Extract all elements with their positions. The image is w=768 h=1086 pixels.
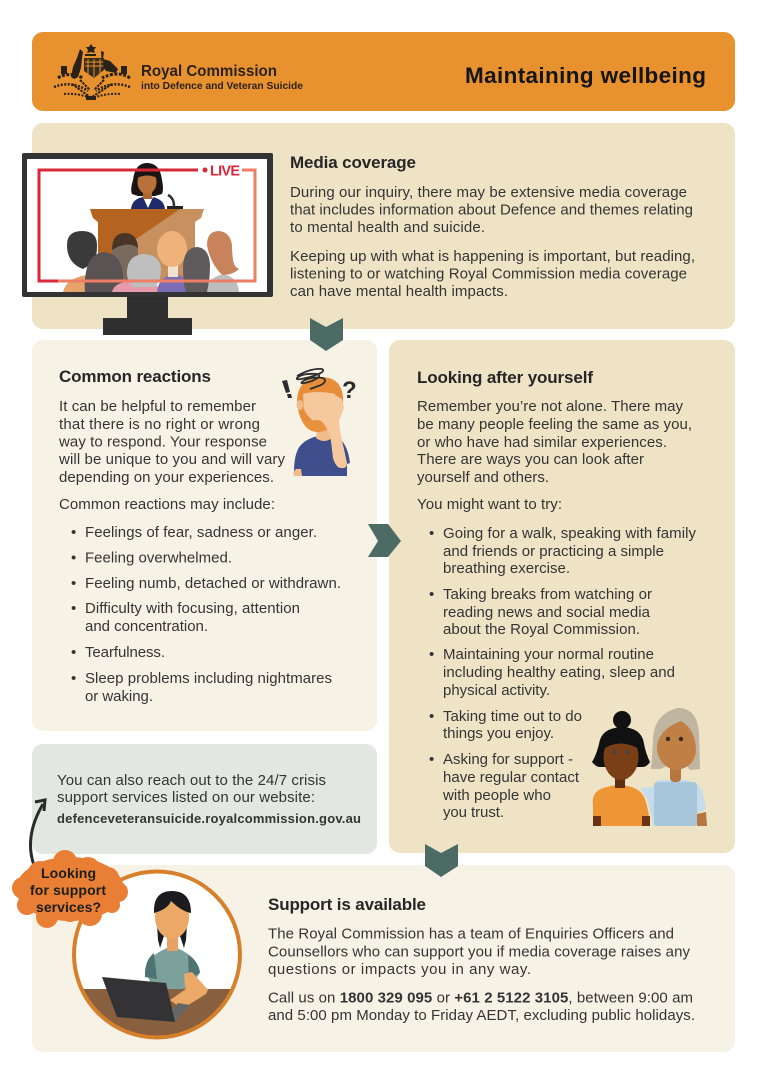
heading: media coverage: Media coverage <box>290 153 416 172</box>
list: things to try: and friends or practicing a simple <box>443 543 664 560</box>
heading: support is available: Support is available <box>268 895 426 914</box>
list: things to try: about the Royal Commission. <box>443 621 640 638</box>
text: media impacts <box>290 248 695 300</box>
text: media intro: During our inquiry, there may be extensive media coverage <box>290 184 687 201</box>
text: not alone <box>417 398 692 486</box>
text: media impacts: can have mental health impacts. <box>290 283 508 300</box>
heading: looking after yourself: Looking after yourself <box>417 368 593 387</box>
list: things to try <box>429 525 696 821</box>
list: things to try: including healthy eating, sleep and <box>443 664 675 681</box>
list: reactions: • <box>71 524 76 541</box>
illustration: person at laptop in circle <box>72 870 242 1040</box>
LIVE label: LIVE <box>210 164 240 180</box>
list: things to try: physical activity. <box>443 682 550 699</box>
question mark: ? <box>342 377 357 404</box>
text: media intro <box>290 184 693 236</box>
text: not alone: There are ways you can look after <box>417 451 644 468</box>
arm <box>170 972 208 1005</box>
title: Maintaining wellbeing <box>465 63 706 88</box>
audience <box>63 231 239 292</box>
arrow: media to reactions <box>310 318 343 351</box>
panel: media coverage <box>32 123 735 329</box>
panel: crisis support services <box>32 744 377 854</box>
arrow: looking after to support <box>425 844 458 877</box>
list: reactions <box>71 524 341 705</box>
text: not alone: be many people feeling the same as you, <box>417 416 692 433</box>
text: media impacts: Keeping up with what is happening is important, but reading, <box>290 248 695 265</box>
callout text: services? <box>36 899 101 915</box>
list: things to try: with people who <box>442 787 551 804</box>
list: reactions: Sleep problems including nightmares <box>85 670 332 687</box>
text: support team: questions or impacts you in any way. <box>268 961 531 978</box>
list: reactions: Difficulty with focusing, attention <box>85 600 300 617</box>
list: things to try: • <box>429 525 434 542</box>
list: reactions: • <box>71 575 76 592</box>
text: media intro: that includes information about Defence and themes relating <box>290 202 693 218</box>
list: things to try: things you enjoy. <box>443 725 554 742</box>
text: reactions intro: will be unique to you and will vary <box>58 451 286 468</box>
heading: common reactions: Common reactions <box>59 367 211 386</box>
text: support team <box>268 926 690 978</box>
logo text <box>141 63 303 92</box>
text: media impacts: listening to or watching Royal Commission media coverage <box>290 266 687 282</box>
list: things to try: • <box>429 646 434 663</box>
callout text: Looking <box>41 865 96 881</box>
list: reactions: Feelings of fear, sadness or anger. <box>85 524 317 541</box>
text: media intro: to mental health and suicide. <box>290 219 485 236</box>
callout text <box>30 865 106 915</box>
text: reactions may include: Common reactions may include: <box>59 496 275 513</box>
callout text: for support <box>30 882 106 898</box>
list: reactions: and concentration. <box>85 618 208 635</box>
laptop <box>102 977 190 1022</box>
panel: support is available <box>32 865 735 1052</box>
text: not alone: yourself and others. <box>417 469 549 486</box>
list: things to try: breathing exercise. <box>443 560 570 577</box>
text: not alone: Remember you’re not alone. There may <box>417 398 684 415</box>
desk <box>84 989 230 1036</box>
list: things to try: Taking breaks from watching or <box>443 586 652 603</box>
text: support team: The Royal Commission has a team of Enquiries Officers and <box>268 926 674 942</box>
LIVE frame <box>39 170 255 281</box>
icon: coat of arms <box>54 44 130 98</box>
text: reactions intro: that there is no right or wrong <box>59 416 260 433</box>
text: contact details <box>268 990 695 1024</box>
list: reactions: • <box>71 644 76 661</box>
list: reactions: • <box>71 550 76 566</box>
text: reactions intro: It can be helpful to remember <box>59 398 256 415</box>
text: support team: Counsellors who can support you if media coverage raises any <box>268 944 690 960</box>
lectern <box>90 209 204 282</box>
list: things to try: Maintaining your normal routine <box>443 646 654 663</box>
list: things to try: Going for a walk, speaking with family <box>443 525 696 542</box>
text: crisis services <box>57 772 326 806</box>
text: you might want to try: You might want to try: <box>417 496 562 513</box>
header banner <box>32 32 735 111</box>
panel: common reactions <box>32 340 377 731</box>
text: contact details: and 5:00 pm Monday to Friday AEDT, excluding public holidays. <box>268 1007 695 1024</box>
list: things to try: have regular contact <box>443 769 580 786</box>
logo text: Royal Commission <box>141 63 277 80</box>
list: things to try: reading news and social media <box>443 604 651 621</box>
logo text: into Defence and Veteran Suicide <box>141 80 303 92</box>
illustration: TV with press conference <box>22 153 273 335</box>
exclamation mark <box>282 380 292 398</box>
text: contact details: Call us on 1800 329 095 or +61 2 5122 3105, between 9:00 am <box>268 990 693 1006</box>
list: reactions: Tearfulness. <box>85 644 165 661</box>
arrow: reactions to looking after <box>368 524 401 557</box>
list: things to try: • <box>429 586 434 603</box>
text: reactions intro: way to respond. Your response <box>58 434 267 450</box>
presenter <box>131 163 183 209</box>
list: reactions: Feeling numb, detached or withdrawn. <box>85 575 341 592</box>
list: things to try: • <box>429 708 434 725</box>
callout: looking for support services <box>12 850 128 928</box>
text: reactions intro <box>58 398 286 486</box>
list: things to try: you trust. <box>443 804 504 821</box>
list: things to try: • <box>429 751 434 768</box>
list: things to try: Asking for support - <box>443 751 573 768</box>
list: reactions: • <box>71 600 76 617</box>
text: crisis services: support services listed on our website: <box>57 789 315 806</box>
illustration: two friends <box>592 708 707 826</box>
text: not alone: or who have had similar experiences. <box>417 434 667 451</box>
list: reactions: • <box>71 670 76 687</box>
person <box>145 891 200 990</box>
arrow: callout to website <box>30 800 45 868</box>
panel: looking after yourself <box>389 340 735 853</box>
list: reactions: or waking. <box>85 688 153 705</box>
website link: defenceveteransuicide.royalcommission.gov.au <box>57 811 361 826</box>
icon: confused man <box>282 369 357 476</box>
list: reactions: Feeling overwhelmed. <box>85 550 232 566</box>
text: reactions intro: depending on your experiences. <box>59 469 274 486</box>
list: things to try: Taking time out to do <box>443 708 582 725</box>
text: crisis services: You can also reach out to the 24/7 crisis <box>57 772 326 789</box>
